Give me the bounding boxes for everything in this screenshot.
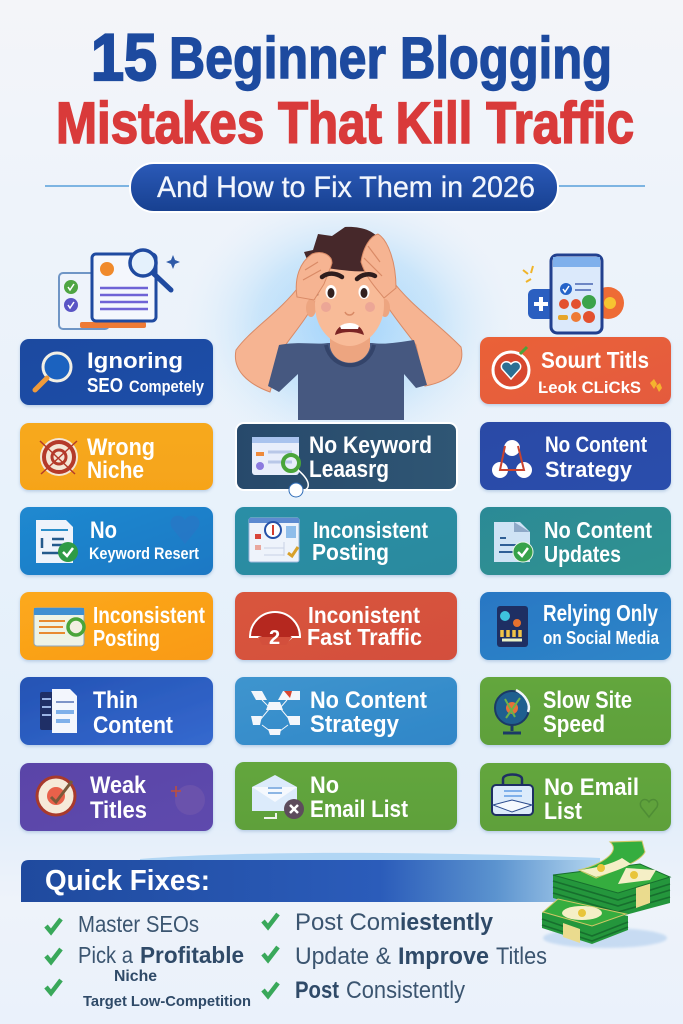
quick fixes banner [21,853,600,902]
card: Thin Content [20,677,213,745]
fix: Post Consistently [295,977,465,1004]
fix: Pick a Profitable Niche: Niche [114,968,157,985]
fix: Post Comiestently: Post Com [295,909,400,936]
title [56,20,634,156]
fix: Master SEOs: Master SEOs [78,911,199,937]
decoration: faint heart [640,800,658,817]
icon: SEO documents and magnifier [59,250,180,329]
card: Inconsistent Posting (centre): Posting [312,539,389,565]
fix: Post Consistently: Consistently [346,977,465,1004]
icon: speed gauge: 2 [269,627,280,649]
card: No Keyword Research [236,423,457,497]
card: No Keyword Research: Keyword Resert [89,544,199,563]
card: Inconsistent Posting (left): Posting [93,625,160,651]
card: No Email List (centre) [235,762,457,830]
icon: heart target [493,347,529,388]
card: Inconsistent Posting (centre): Inconsistent [313,517,428,543]
card: No Email List (centre): No [310,772,339,799]
check mark [46,980,61,993]
title: Blogging [400,26,612,91]
fix: Pick a Profitable Niche: Profitable [140,942,244,968]
card: Inconsistent Fast Traffic: Fast Traffic [307,624,422,650]
illustration: stacks of cash [542,841,670,948]
icon: thin document [40,689,77,733]
icon: phone with social apps [523,255,624,333]
card: Short Titles Lack Clicks: Ŀeok CLiCkS [538,378,641,397]
card: No Content Strategy (right): Strategy [545,457,633,482]
card: Relying Only on Social Media: Relying Only [543,600,658,626]
icon: speed gauge [250,612,300,649]
icon: globe on stand [495,690,529,733]
card: Short Titles Lack Clicks [480,337,671,404]
illustration: stressed man holding his head [235,227,462,420]
card: No Content Strategy (centre): No Content [310,687,427,714]
quick fix list: left column [46,911,251,1010]
card: Relying Only on Social Media: on Social Media [543,628,660,648]
card: Weak Titles: Titles [90,797,147,824]
title: 15 [91,20,157,94]
card: No Keyword Research: No Keyword [309,432,432,459]
icon: browser and ring [34,608,84,646]
icon: magnifier [35,353,71,390]
subtitle pill: And How to Fix Them in 2026 [157,171,535,204]
card: Slow Site Speed: Speed [543,711,605,738]
check mark [263,914,278,927]
fix: Update & Improve Titles [295,943,547,970]
card: Wrong Niche: Niche [87,457,144,484]
card: No Keyword Research [20,507,213,575]
card: Ignoring SEO Completely: Ignoring [87,348,183,373]
card: No Content Strategy (centre) [235,677,457,745]
card: Inconsistent Posting (centre) [235,507,457,575]
icon: phone with apps [497,606,528,647]
card: Ignoring SEO Completely [20,339,213,405]
fix: Pick a Profitable Niche [78,942,244,985]
icon: document with check [36,520,78,563]
card: Wrong Niche: Wrong [87,434,155,461]
card: Inconsistent Fast Traffic [235,592,457,660]
decoration: faint heart [171,516,199,544]
card: Inconsistent Posting (left): Inconsistent [93,602,205,628]
card: No Content Updates [480,507,671,575]
card: No Keyword Research: No [90,517,117,544]
card: No Email List (right) [480,763,671,831]
card: No Email List (centre): Email List [310,796,408,823]
check mark [263,947,278,960]
card: Weak Titles [20,763,213,831]
icon: hexagon network [251,691,300,735]
title: Beginner [169,26,386,91]
icon: clock with check [37,777,75,815]
card: Weak Titles: Weak [90,772,147,799]
check mark [263,983,278,996]
quick fixes banner: Quick Fixes: [45,865,210,897]
card: No Content Strategy (right): No Content [545,432,648,457]
card: Slow Site Speed: Slow Site [543,687,632,714]
icon: envelope with x [252,775,304,819]
fix: Update & Improve Titles: Titles [496,943,547,970]
icon: linked nodes [492,440,532,478]
card: No Email List (right): No Email [544,774,639,801]
fix: Post Consistently: Post [295,977,339,1004]
fix: Post Comiestently [295,909,494,936]
icon: calendar [249,518,299,562]
decoration: sparkle [650,379,662,392]
card: Wrong Niche [20,423,213,490]
icon: browser and ring [252,437,308,497]
fix: Update & Improve Titles: Improve [398,943,489,970]
card: No Content Strategy (right) [480,422,671,490]
card: No Content Updates: No Content [544,517,652,543]
card: Thin Content: Thin [93,687,138,714]
fix: Update & Improve Titles: Update & [295,943,391,970]
card: No Content Strategy (centre): Strategy [310,711,400,738]
card: No Content Updates: Updates [544,541,621,567]
fix: Post Comiestently: iestently [400,909,494,936]
check mark [46,949,61,962]
decoration: faint circle and plus [171,785,205,815]
quick fix list: right column [263,909,547,1004]
card: Slow Site Speed [480,677,671,745]
icon: target [40,438,78,476]
subtitle pill [45,163,645,212]
card: Short Titles Lack Clicks: Soɯrt Titls [541,347,649,373]
card: Ignoring SEO Completely: Competely [129,377,204,396]
fix: Pick a Profitable Niche: Pick a [78,942,133,968]
card: Relying Only on Social Media [480,592,671,660]
fix: Target Low-Competition: Target Low-Competition [83,993,251,1010]
icon: envelope bag [492,774,533,815]
card: Thin Content: Content [93,712,173,739]
check mark [46,919,61,932]
card: Inconsistent Posting (left) [20,592,213,660]
card: No Email List (right): List [544,798,582,825]
card: No Keyword Research: Leaasrg [309,456,389,483]
card: Inconsistent Fast Traffic: Inconistent [308,602,420,628]
card: Ignoring SEO Completely: SEO [87,375,123,397]
icon: document with check [494,522,533,562]
